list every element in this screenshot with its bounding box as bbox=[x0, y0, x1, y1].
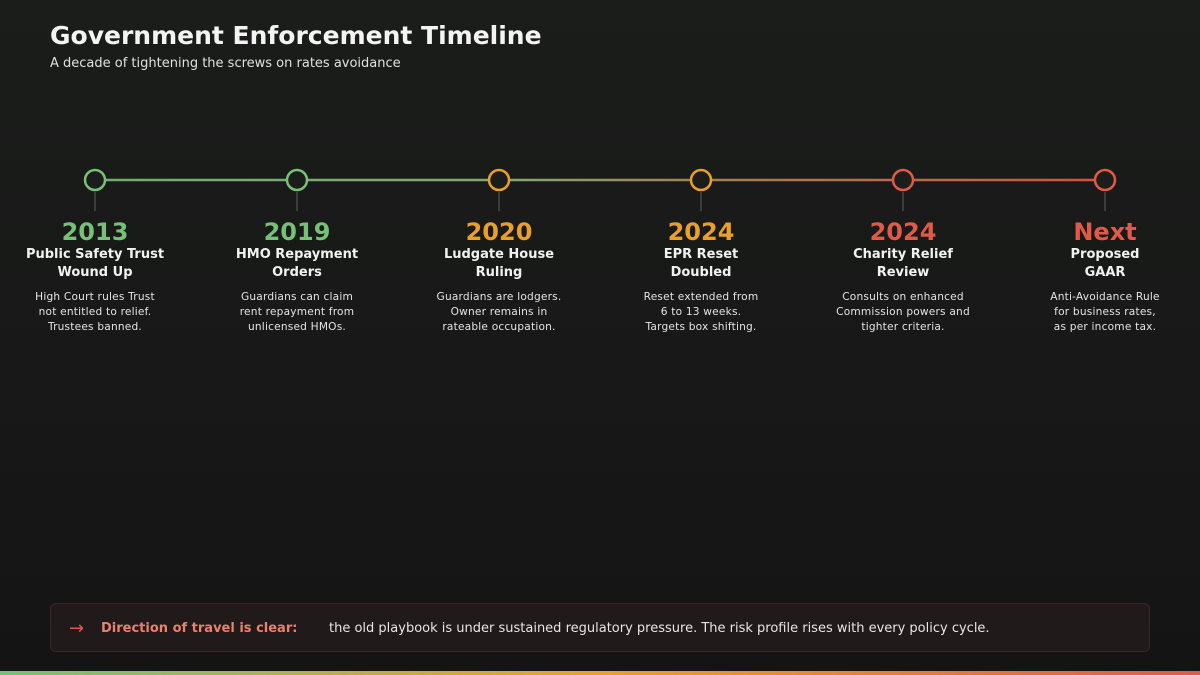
timeline line and nodes bbox=[84, 168, 1116, 211]
milestone 2019 bbox=[236, 218, 358, 333]
callout: the old playbook is under sustained regulatory pressure. The risk profile rises with every policy cycle. bbox=[329, 621, 990, 636]
milestone next: for business rates, bbox=[1054, 306, 1156, 318]
title: Government Enforcement Timeline bbox=[50, 21, 542, 50]
milestone 2019: Orders bbox=[272, 265, 322, 280]
milestone 2024 EPR: EPR Reset bbox=[664, 247, 738, 262]
milestone 2013: Trustees banned. bbox=[48, 321, 142, 333]
milestone next: as per income tax. bbox=[1054, 321, 1156, 333]
milestone 2024 charity: 2024 bbox=[870, 218, 936, 246]
milestone 2024 charity: Consults on enhanced bbox=[842, 291, 964, 303]
milestone 2020: Owner remains in bbox=[451, 306, 547, 318]
milestone next: Anti-Avoidance Rule bbox=[1050, 291, 1160, 303]
milestone 2024 EPR: Doubled bbox=[671, 265, 731, 280]
bottom gradient bar bbox=[0, 671, 1200, 675]
milestone 2019: unlicensed HMOs. bbox=[248, 321, 346, 333]
milestone 2024 EPR: 6 to 13 weeks. bbox=[661, 306, 741, 318]
milestone 2020: 2020 bbox=[466, 218, 532, 246]
milestone 2024 charity: tighter criteria. bbox=[861, 321, 945, 333]
milestone 2024 charity: Review bbox=[877, 265, 929, 280]
milestone 2013: Wound Up bbox=[57, 265, 132, 280]
callout: Direction of travel is clear: bbox=[101, 621, 297, 636]
milestone 2024 EPR bbox=[644, 218, 758, 333]
milestone next: Proposed bbox=[1071, 247, 1139, 262]
milestone 2020: Ruling bbox=[476, 265, 522, 280]
milestone 2019: 2019 bbox=[264, 218, 330, 246]
milestone 2020: Ludgate House bbox=[444, 247, 554, 262]
milestone 2013: not entitled to relief. bbox=[39, 306, 151, 318]
callout: → bbox=[69, 618, 84, 639]
milestone 2019: Guardians can claim bbox=[241, 291, 353, 303]
milestone next: Next bbox=[1073, 218, 1137, 246]
milestone 2020: Guardians are lodgers. bbox=[437, 291, 561, 303]
callout bbox=[50, 603, 1150, 652]
milestone 2024 EPR: Reset extended from bbox=[644, 291, 758, 303]
milestone next bbox=[1050, 218, 1160, 333]
milestone 2024 charity bbox=[836, 218, 970, 333]
milestone next: GAAR bbox=[1085, 265, 1125, 280]
milestone 2024 charity: Commission powers and bbox=[836, 306, 970, 318]
milestone 2020: rateable occupation. bbox=[442, 321, 556, 333]
milestone 2019: rent repayment from bbox=[240, 306, 354, 318]
milestone 2013: High Court rules Trust bbox=[35, 291, 155, 303]
milestone 2024 EPR: Targets box shifting. bbox=[646, 321, 756, 333]
milestone 2013: Public Safety Trust bbox=[26, 247, 164, 262]
subtitle: A decade of tightening the screws on rates avoidance bbox=[50, 56, 401, 71]
milestone 2024 charity: Charity Relief bbox=[853, 247, 953, 262]
milestone 2024 EPR: 2024 bbox=[668, 218, 734, 246]
milestone 2019: HMO Repayment bbox=[236, 247, 358, 262]
milestone 2020 bbox=[437, 218, 561, 333]
milestone 2013: 2013 bbox=[62, 218, 128, 246]
milestone 2013 bbox=[26, 218, 164, 333]
